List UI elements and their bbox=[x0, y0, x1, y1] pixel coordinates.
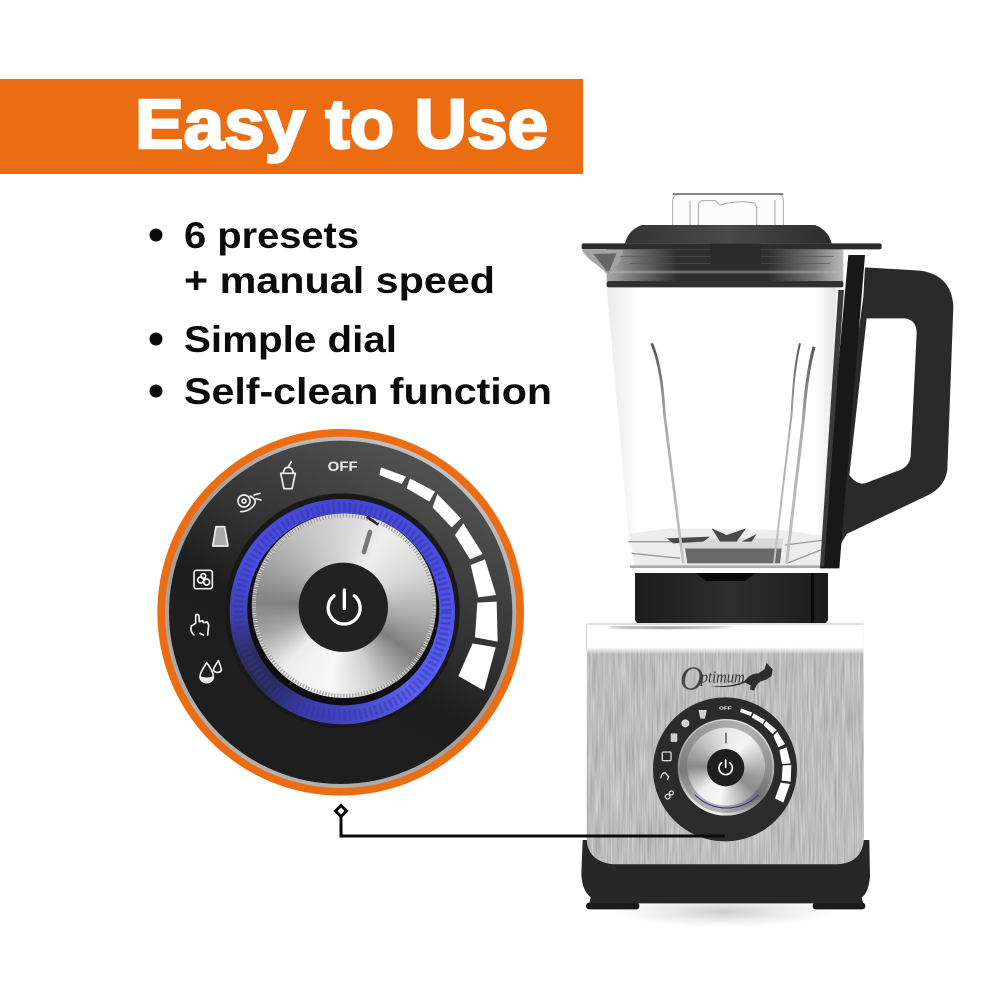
jar handle bbox=[820, 255, 953, 568]
large dial callout bbox=[157, 429, 524, 796]
feature bullet list: 6 presets bbox=[184, 215, 359, 256]
jar collar bbox=[582, 249, 843, 287]
icon: water drops bbox=[200, 661, 221, 683]
blade bbox=[667, 528, 757, 543]
brand logo: O bbox=[680, 660, 703, 697]
feature bullet list: Self-clean function bbox=[184, 371, 552, 412]
small dial bbox=[653, 697, 797, 841]
connector diamond end bbox=[336, 806, 346, 816]
icon: carrot bbox=[238, 493, 261, 512]
metal knob bbox=[252, 513, 436, 698]
speed segments bbox=[379, 467, 498, 691]
brand logo: ptimum bbox=[700, 668, 745, 687]
preset icons bbox=[191, 462, 295, 683]
icon: grater bbox=[213, 527, 228, 546]
blue LED ring bbox=[230, 499, 455, 724]
small dial white segments bbox=[740, 708, 791, 803]
icon: gears box bbox=[194, 570, 212, 589]
floor shadow bbox=[610, 896, 837, 928]
motor neck bbox=[635, 573, 828, 623]
lid bbox=[582, 225, 882, 264]
pointer mark bbox=[364, 532, 370, 552]
connector arrow from base dial to callout bbox=[336, 806, 725, 836]
glass jar body bbox=[607, 287, 837, 568]
small dial label and icons: OFF bbox=[719, 706, 732, 712]
icon: hand bbox=[191, 614, 209, 635]
small dial metal knob bbox=[678, 719, 774, 816]
feet bbox=[586, 903, 865, 909]
jar lid knob bbox=[673, 194, 783, 225]
blender jar bbox=[582, 194, 953, 568]
title text: Easy to Use bbox=[135, 85, 548, 163]
icon: cup bbox=[281, 462, 295, 489]
kangaroo bbox=[710, 663, 773, 691]
steel panel bbox=[583, 623, 867, 867]
feature bullet list: + manual speed bbox=[184, 260, 495, 301]
title banner bbox=[0, 79, 583, 174]
knob shadow bbox=[247, 513, 439, 705]
ribs bbox=[652, 343, 683, 563]
black base bbox=[581, 840, 870, 903]
dial face bbox=[169, 441, 512, 784]
silver rim bbox=[165, 437, 516, 788]
feature bullet list: Simple dial bbox=[184, 319, 397, 360]
orange ring bbox=[157, 429, 524, 796]
OFF label: OFF bbox=[328, 458, 358, 474]
feature bullet list bbox=[150, 215, 552, 412]
brand logo bbox=[680, 660, 773, 697]
blender base bbox=[581, 623, 870, 928]
power button bbox=[299, 563, 388, 652]
